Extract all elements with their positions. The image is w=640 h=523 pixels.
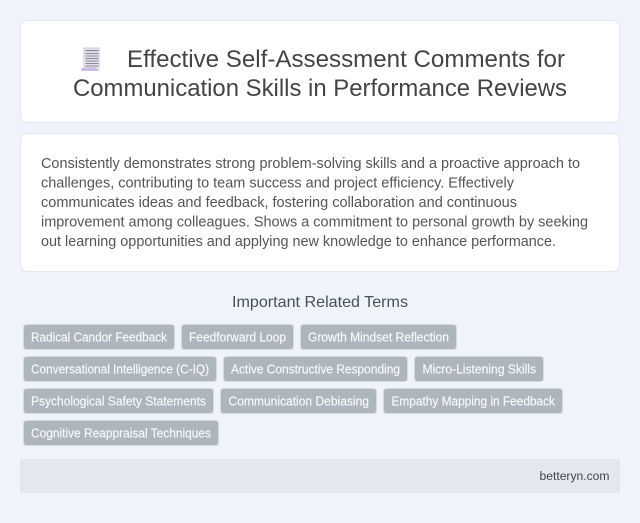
chip: Feedforward Loop: Feedforward Loop [189, 330, 286, 344]
panel: term chips [24, 324, 562, 446]
footer bar [20, 459, 620, 493]
description text: Consistently demonstrates strong problem-solving skills and a proactive approach to [41, 156, 580, 172]
chip: Radical Candor Feedback: Radical Candor Feedback [31, 330, 168, 344]
chip: Conversational Intelligence [24, 356, 216, 382]
chip: Conversational Intelligence: Conversational Intelligence (C-IQ) [31, 362, 209, 376]
panel: title card [20, 20, 620, 122]
footer source text: betteryn.com [540, 469, 610, 483]
chip: Psychological Safety Statements: Psychological Safety Statements [31, 394, 206, 408]
chip: Cognitive Reappraisal Techniques [24, 420, 218, 446]
chip: Psychological Safety Statements [24, 388, 214, 414]
chip: Communication Debiasing [220, 388, 376, 414]
description text: improvement among colleagues. Shows a commitment to personal growth by seeking [41, 214, 588, 230]
chip: Growth Mindset Reflection: Growth Mindset Reflection [308, 330, 449, 344]
chip: Communication Debiasing: Communication Debiasing [228, 394, 369, 408]
chip: Micro-Listening Skills: Micro-Listening Skills [422, 362, 536, 376]
chip: Radical Candor Feedback [24, 324, 174, 350]
chip: Empathy Mapping in Feedback [384, 388, 562, 414]
title line 2: Communication Skills in Performance Reviews [73, 75, 567, 102]
description text: out learning opportunities and applying new knowledge to enhance performance. [41, 234, 556, 250]
chip: Micro-Listening Skills [414, 356, 544, 382]
chip: Active Constructive Responding [224, 356, 408, 382]
title line 1: Effective Self-Assessment Comments for [127, 46, 565, 73]
chip: Active Constructive Responding: Active Constructive Responding [231, 362, 400, 376]
chip: Growth Mindset Reflection [300, 324, 456, 350]
description text [41, 156, 588, 250]
chip: Cognitive Reappraisal Techniques: Cognitive Reappraisal Techniques [31, 426, 211, 440]
chip: Feedforward Loop [182, 324, 294, 350]
heading: related terms: Important Related Terms [232, 294, 408, 311]
icon: paper scroll [81, 48, 100, 71]
panel: description card [20, 134, 620, 272]
description text: communicates ideas and feedback, fostering collaboration and continuous [41, 195, 517, 211]
description text: challenges, contributing to team success and project efficiency. Effectively [41, 176, 515, 192]
chip: Empathy Mapping in Feedback: Empathy Mapping in Feedback [392, 394, 556, 408]
